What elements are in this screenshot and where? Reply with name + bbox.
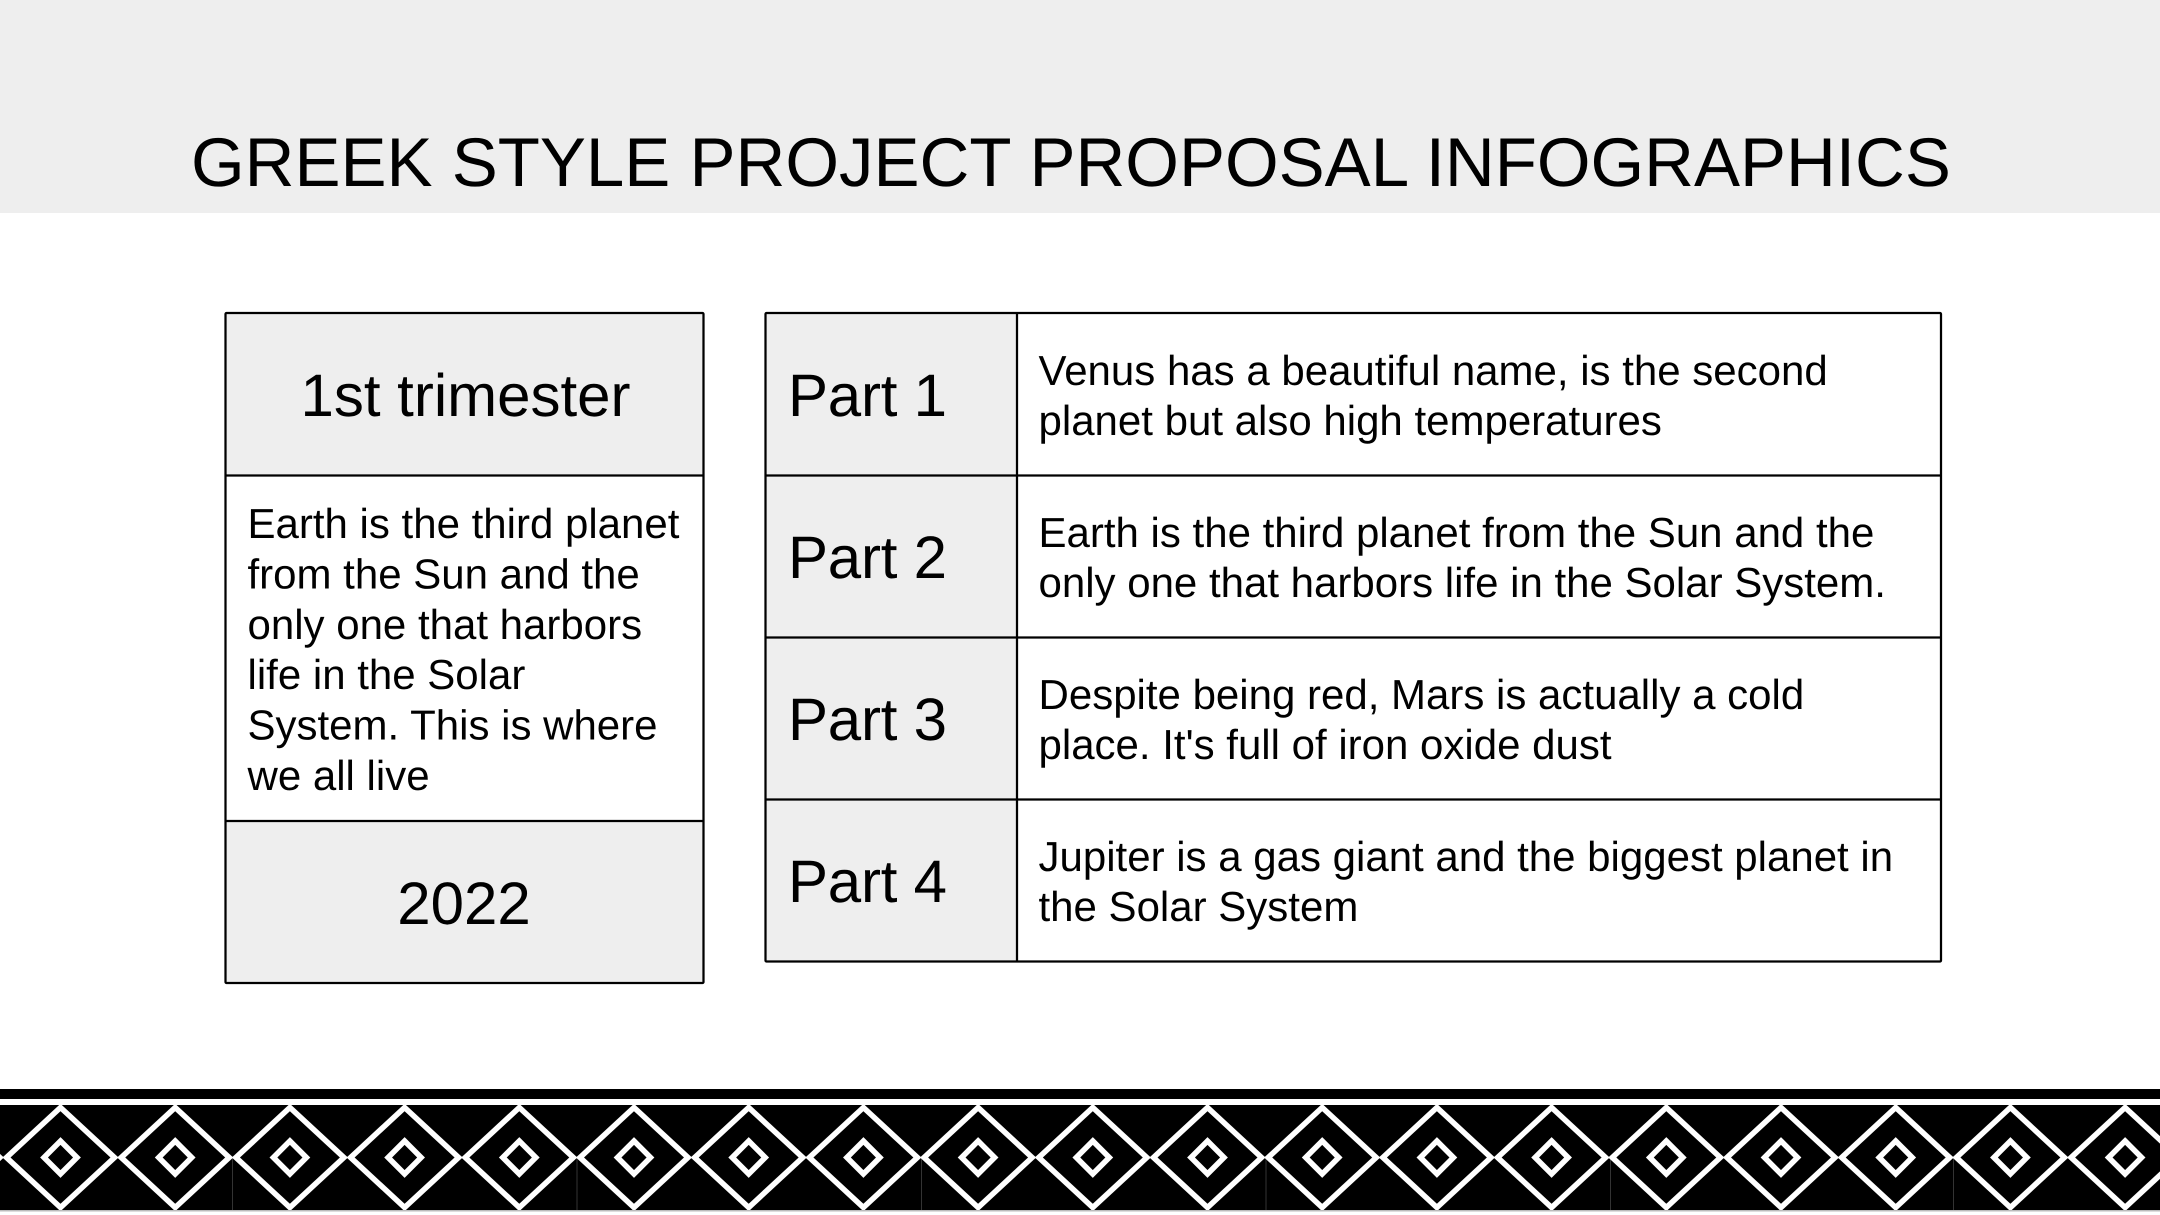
- label column background: [766, 313, 1017, 961]
- card heading cell: [226, 313, 704, 475]
- row: Part 3: place. It's full of iron oxide dust: [1038, 721, 1612, 768]
- row: Part 1: Part 1: [788, 362, 947, 429]
- card description text: life in the Solar: [248, 651, 525, 698]
- row: Part 2: only one that harbors life in the Solar System.: [1038, 559, 1886, 606]
- panel: 1st trimester card: [226, 313, 704, 983]
- row: Part 2: Part 2: [788, 524, 947, 591]
- card description text: from the Sun and the: [248, 550, 640, 598]
- card description text: we all live: [246, 752, 430, 799]
- card description text: System. This is where: [248, 702, 658, 748]
- row: Part 1: [788, 347, 1828, 444]
- card description text: Earth is the third planet: [248, 500, 680, 547]
- card heading cell: 1st trimester: [300, 362, 631, 429]
- header band with title: [0, 0, 2160, 213]
- row: Part 2: Earth is the third planet from the Sun and the: [1038, 509, 1874, 556]
- card year cell: [226, 821, 704, 983]
- row: Part 4: the Solar System: [1038, 883, 1358, 930]
- decorative Greek border: [0, 1089, 2160, 1212]
- row: Part 4: Jupiter is a gas giant and the biggest planet in: [1038, 833, 1893, 880]
- card description text: only one that harbors: [248, 601, 642, 648]
- title: GREEK STYLE PROJECT PROPOSAL INFOGRAPHICS: [191, 124, 1951, 201]
- panel: parts table: [766, 313, 1941, 962]
- row: Part 4: Part 4: [788, 848, 947, 915]
- card year cell: 2022: [397, 870, 531, 937]
- row: Part 3: Despite being red, Mars is actually a cold: [1038, 671, 1804, 718]
- row: Part 2: [788, 509, 1886, 606]
- row: Part 1: Venus has a beautiful name, is the second: [1038, 347, 1828, 394]
- row: Part 3: [788, 671, 1804, 768]
- card description text: [246, 500, 680, 799]
- row: Part 1: planet but also high temperatures: [1038, 397, 1662, 444]
- row: Part 3: Part 3: [788, 686, 947, 753]
- row: Part 4: [788, 833, 1893, 930]
